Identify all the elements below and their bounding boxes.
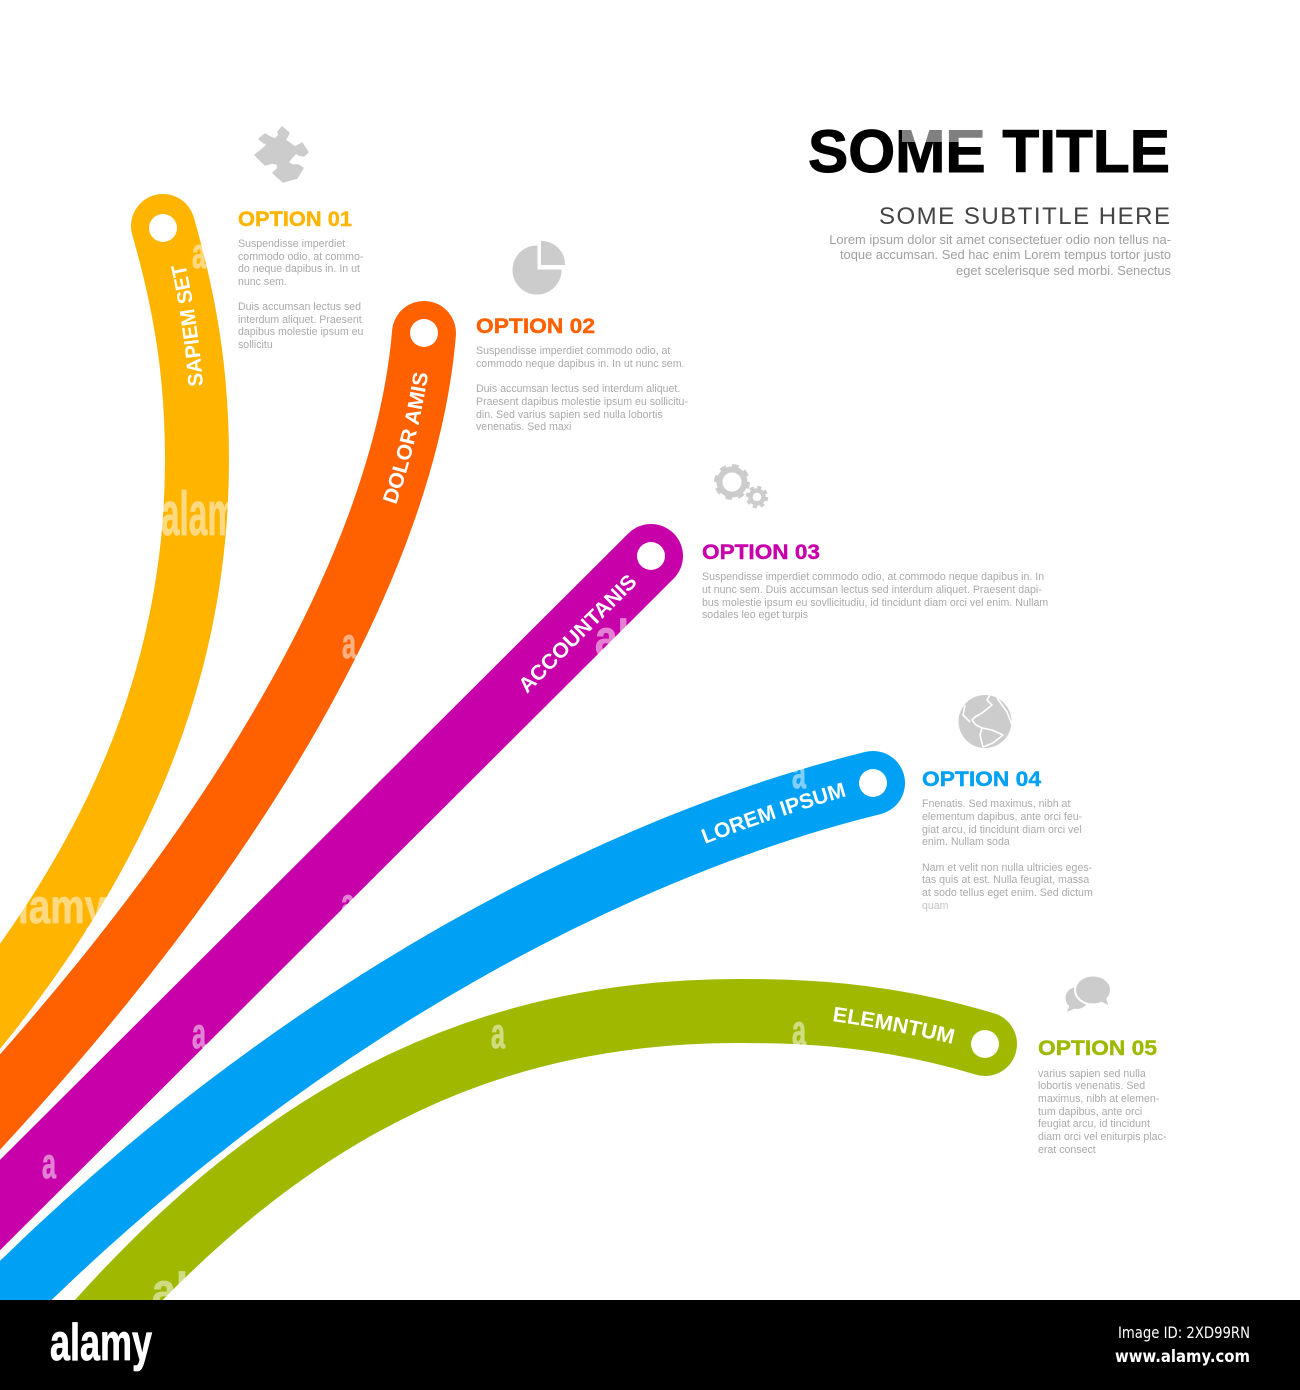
icon: chat bubbles — [1066, 976, 1111, 1012]
band: green elemntum — [75, 979, 1017, 1300]
text: option 01: Suspendisse imperdiet — [238, 238, 345, 250]
text: option 03: ut nunc sem. Duis accumsan lectus sed interdum aliquet. Praesent dapi- — [702, 584, 1042, 596]
band: orange dolor amis — [0, 301, 456, 1150]
watermark marks on bands: a — [192, 1010, 207, 1058]
text: option 01: commodo odio, at commo- — [238, 251, 364, 263]
text: option 01: dapibus molestie ipsum eu — [238, 326, 364, 338]
footer logo: alamy — [50, 1314, 152, 1372]
intro text — [829, 232, 1171, 278]
icon: pie chart — [513, 242, 564, 294]
text: option 03: sodales leo eget turpis — [702, 609, 808, 621]
band: blue lorem ipsum — [0, 751, 905, 1300]
panel: option 03 — [702, 466, 1048, 621]
panel: option 02 — [476, 242, 688, 433]
watermark marks on bands: a — [342, 620, 357, 668]
heading: option 04: OPTION 04 — [922, 768, 1041, 791]
text: option 05: feugiat arcu, id tincidunt — [1038, 1118, 1150, 1130]
heading: option 01: OPTION 01 — [238, 208, 352, 231]
panel: option 01 — [238, 127, 364, 351]
text: option 05: tum dapibus, ante orci — [1038, 1106, 1142, 1118]
text: option 04: Fnenatis. Sed maximus, nibh at — [922, 798, 1070, 810]
band: yellow sapiem set: SAPIEM SET — [171, 266, 203, 386]
footer image id: Image ID: 2XD99RN — [1118, 1323, 1250, 1342]
icon: gears — [716, 466, 766, 506]
text: option 05 — [1038, 1068, 1167, 1156]
panel: option 05 — [1038, 976, 1167, 1156]
band: magenta accountanis: ACCOUNTANIS — [521, 575, 636, 694]
heading: option 03: OPTION 03 — [702, 541, 820, 564]
band: yellow sapiem set — [0, 194, 229, 1049]
heading: option 02: OPTION 02 — [476, 315, 595, 338]
watermark marks on bands: al — [595, 610, 629, 666]
title: SOME TITLE — [808, 118, 1170, 185]
text: option 05: diam orci vel eniturpis plac- — [1038, 1131, 1167, 1143]
watermark marks on bands: al — [152, 1263, 188, 1319]
icon: puzzle piece — [255, 127, 308, 182]
watermark marks on bands: lamy — [18, 881, 106, 934]
text: option 05: lobortis venenatis. Sed — [1038, 1080, 1145, 1092]
panel: option 04 — [922, 695, 1093, 912]
watermark marks on bands: a — [491, 1010, 506, 1058]
text: option 01: nunc sem. — [238, 276, 287, 288]
text: option 04 — [922, 798, 1093, 912]
text: option 05: maximus, nibh at elemen- — [1038, 1093, 1160, 1105]
text: option 02: commodo neque dapibus in. In ut nunc sem. — [476, 358, 684, 370]
band: orange dolor amis: DOLOR AMIS — [382, 372, 428, 504]
footer bar — [0, 1300, 1300, 1390]
text: option 03: Suspendisse imperdiet commodo odio, at commodo neque dapibus in. In — [702, 571, 1044, 583]
text: option 02: Suspendisse imperdiet commodo odio, at — [476, 345, 670, 357]
text: option 01 — [238, 238, 364, 351]
text: option 02: Praesent dapibus molestie ipsum eu sollicitu- — [476, 396, 688, 408]
text: option 01: do neque dapibus in. In ut — [238, 263, 360, 275]
subtitle: SOME SUBTITLE HERE — [879, 203, 1170, 230]
text: option 04: giat arcu, id tincidunt diam orci vel — [922, 824, 1082, 836]
text: option 02: venenatis. Sed maxi — [476, 421, 571, 433]
text: option 01: interdum aliquet. Praesent — [238, 314, 362, 326]
text: option 03: bus molestie ipsum eu sovllicitudiu, id tincidunt diam orci vel enim. Nullam — [702, 597, 1048, 609]
band: blue lorem ipsum: LOREM IPSUM — [701, 782, 846, 844]
icon: globe — [958, 695, 1012, 748]
text: option 04: Nam et velit non nulla ultricies eges- — [922, 862, 1093, 874]
text: option 03 — [702, 571, 1048, 621]
heading: option 05: OPTION 05 — [1038, 1037, 1157, 1060]
text: option 04: tas quis at est. Nulla feugiat, massa — [922, 874, 1089, 886]
text: option 04: enim. Nullam soda — [922, 836, 1010, 848]
text: option 02: din. Sed varius sapien sed nulla lobortis — [476, 409, 663, 421]
text: option 01: sollicitu — [238, 339, 273, 351]
band: green elemntum: ELEMNTUM — [833, 1006, 955, 1044]
intro text: eget scelerisque sed morbi. Senectus — [956, 263, 1171, 278]
text: option 04: elementum dapibus, ante orci feu- — [922, 811, 1083, 823]
footer url: www.alamy.com — [1115, 1347, 1250, 1367]
watermark marks on bands: a — [792, 750, 807, 798]
text: option 05: varius sapien sed nulla — [1038, 1068, 1146, 1080]
text: option 04: quam — [922, 900, 949, 912]
watermark marks on bands: a — [42, 1140, 57, 1188]
text: option 05: erat consect — [1038, 1144, 1096, 1156]
watermark marks on bands: a — [341, 880, 356, 928]
watermark marks on bands: a — [792, 1007, 807, 1055]
text: option 04: at sodo tellus eget enim. Sed dictum — [922, 887, 1093, 899]
watermark marks on bands: a — [192, 230, 207, 278]
watermark marks on bands — [18, 230, 807, 1319]
text: option 01: Duis accumsan lectus sed — [238, 301, 361, 313]
text: option 02 — [476, 345, 688, 433]
intro text: toque accumsan. Sed hac enim Lorem tempus tortor justo — [840, 247, 1171, 262]
band: magenta accountanis — [0, 524, 683, 1250]
text: option 02: Duis accumsan lectus sed interdum aliquet. — [476, 383, 680, 395]
intro text: Lorem ipsum dolor sit amet consectetuer odio non tellus na- — [829, 232, 1171, 247]
watermark marks on bands: alam — [161, 480, 237, 549]
